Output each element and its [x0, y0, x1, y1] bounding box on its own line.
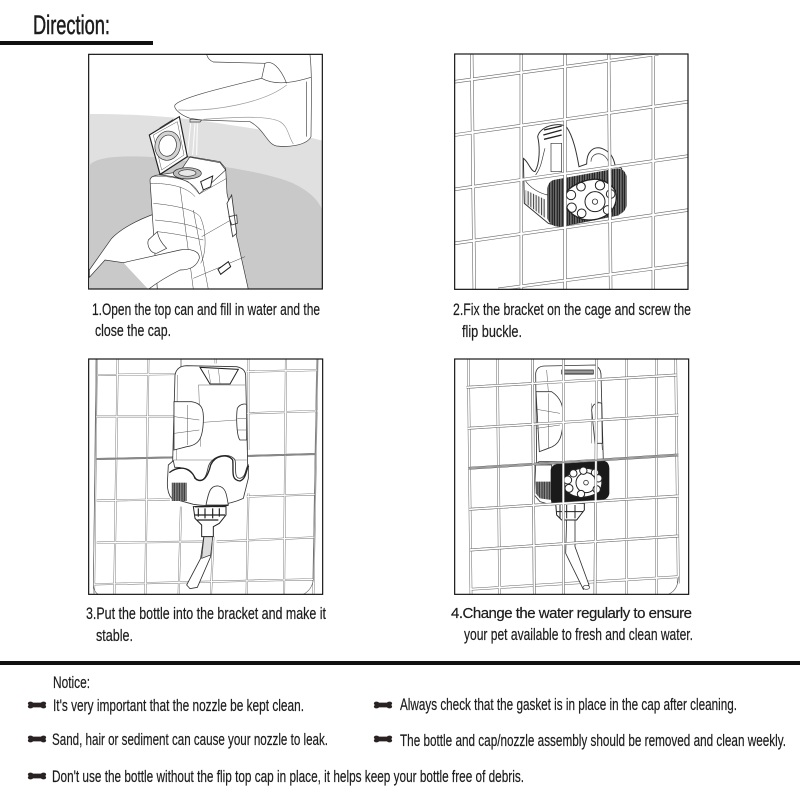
bottle [150, 157, 248, 289]
hand [89, 214, 157, 288]
title underline [0, 41, 153, 45]
panel frame [455, 54, 688, 289]
notice item 3 [28, 767, 524, 786]
basin [90, 156, 322, 289]
title text: Direction: [33, 10, 110, 40]
bottle opening [173, 168, 201, 179]
caption 1: close the cap. [95, 321, 171, 340]
rear tab [206, 486, 228, 505]
striped plate [547, 168, 627, 227]
collar [556, 503, 584, 520]
illustration: bottle on cage, front view [454, 359, 689, 595]
left grip [174, 402, 203, 450]
caption 3: stable. [96, 626, 133, 645]
knob [564, 468, 602, 497]
panel frame [89, 359, 323, 594]
nozzle [566, 518, 589, 589]
bottle body [172, 365, 248, 468]
notice item 3: Don't use the bottle without the flip top cap in place, it helps keep your bottle free of debris. [52, 767, 524, 786]
notice section [28, 673, 786, 786]
caption 1: 1.Open the top can and fill in water and the [92, 300, 320, 319]
bracket body [523, 125, 622, 227]
bracket ribs [172, 483, 187, 501]
faucet [175, 55, 311, 146]
panel: step 1 fill water [88, 54, 323, 340]
notice heading: Notice: [53, 673, 90, 692]
bracket [534, 465, 552, 505]
knob [564, 179, 616, 220]
left grip [536, 392, 563, 452]
panel: step 3 bottle in bracket [86, 359, 326, 645]
caption 2: flip buckle. [462, 322, 522, 341]
flip cap [149, 117, 187, 174]
bracket [167, 455, 248, 506]
caption 3: 3.Put the bottle into the bracket and make it [86, 604, 326, 623]
bottle [536, 365, 603, 463]
panel: step 4 change water [451, 359, 693, 644]
notice item 1: It's very important that the nozzle be kept clean. [53, 696, 304, 715]
panel frame [89, 54, 322, 289]
right grip [237, 404, 247, 440]
illustration: bracket on cage [454, 53, 688, 290]
right clip [592, 403, 602, 443]
notice item 2 [28, 730, 328, 749]
panel frame [455, 359, 689, 594]
section divider [0, 661, 800, 665]
cage wires [93, 359, 317, 594]
sink [90, 114, 322, 208]
title [0, 10, 153, 45]
finger [123, 249, 199, 289]
cage wires behind [467, 359, 678, 594]
side ribs [526, 190, 546, 218]
caption 4: 4.Change the water regularly to ensure [451, 605, 692, 622]
illustration: faucet and bottle [88, 54, 323, 289]
plate [551, 461, 609, 504]
notice item 1 [28, 696, 304, 715]
cage wires in front [467, 359, 678, 594]
cage wires [455, 53, 688, 290]
nozzle tube [187, 535, 213, 589]
nozzle collar [193, 507, 226, 537]
illustration: bottle on cage, rear view [89, 359, 323, 595]
caption 4: your pet available to fresh and clean water. [464, 625, 693, 644]
side clips [227, 195, 237, 237]
panel: step 2 fix bracket [453, 53, 691, 341]
water stream [187, 123, 197, 155]
notice item 2: Sand, hair or sediment can cause your nozzle to leak. [52, 730, 328, 749]
caption 2: 2.Fix the bracket on the cage and screw the [453, 300, 691, 319]
